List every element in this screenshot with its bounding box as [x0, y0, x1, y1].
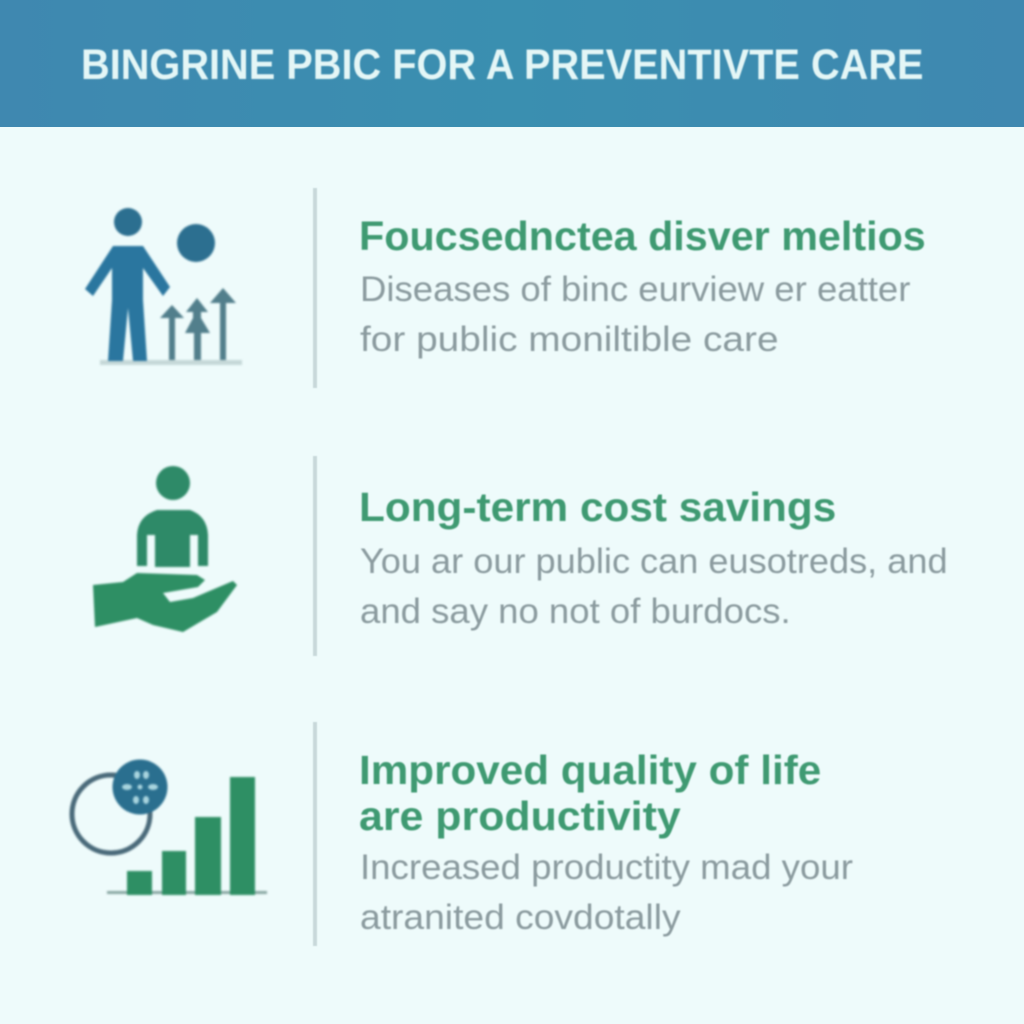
icon: person over hand — [91, 464, 238, 634]
text: row two: and say no not of burdocs. — [360, 592, 791, 631]
text: row three: Increased productity mad your — [360, 848, 853, 887]
heading: row two: Long-term cost savings — [359, 484, 836, 530]
text: row two — [360, 542, 948, 632]
text: row two: You ar our public can eusotreds, and — [360, 542, 948, 581]
icon: circles and bar chart — [68, 758, 268, 897]
text: row three — [360, 848, 854, 938]
text: row one: Diseases of binc eurview er eatter — [360, 270, 910, 309]
text: row one: for public moniltible care — [360, 320, 779, 359]
text: row three: atranited covdotally — [360, 898, 681, 937]
header banner — [0, 0, 1024, 127]
icon: person with arrows — [84, 206, 243, 366]
text: row one — [360, 270, 911, 360]
heading: row three: are productivity — [359, 793, 681, 839]
heading: row three: Improved quality of life — [359, 747, 821, 793]
heading: row three — [359, 747, 821, 840]
title: BINGRINE PBIC FOR A PREVENTIVTE CARE — [81, 41, 924, 89]
heading: row one: Foucsednctea disver meltios — [359, 213, 926, 259]
